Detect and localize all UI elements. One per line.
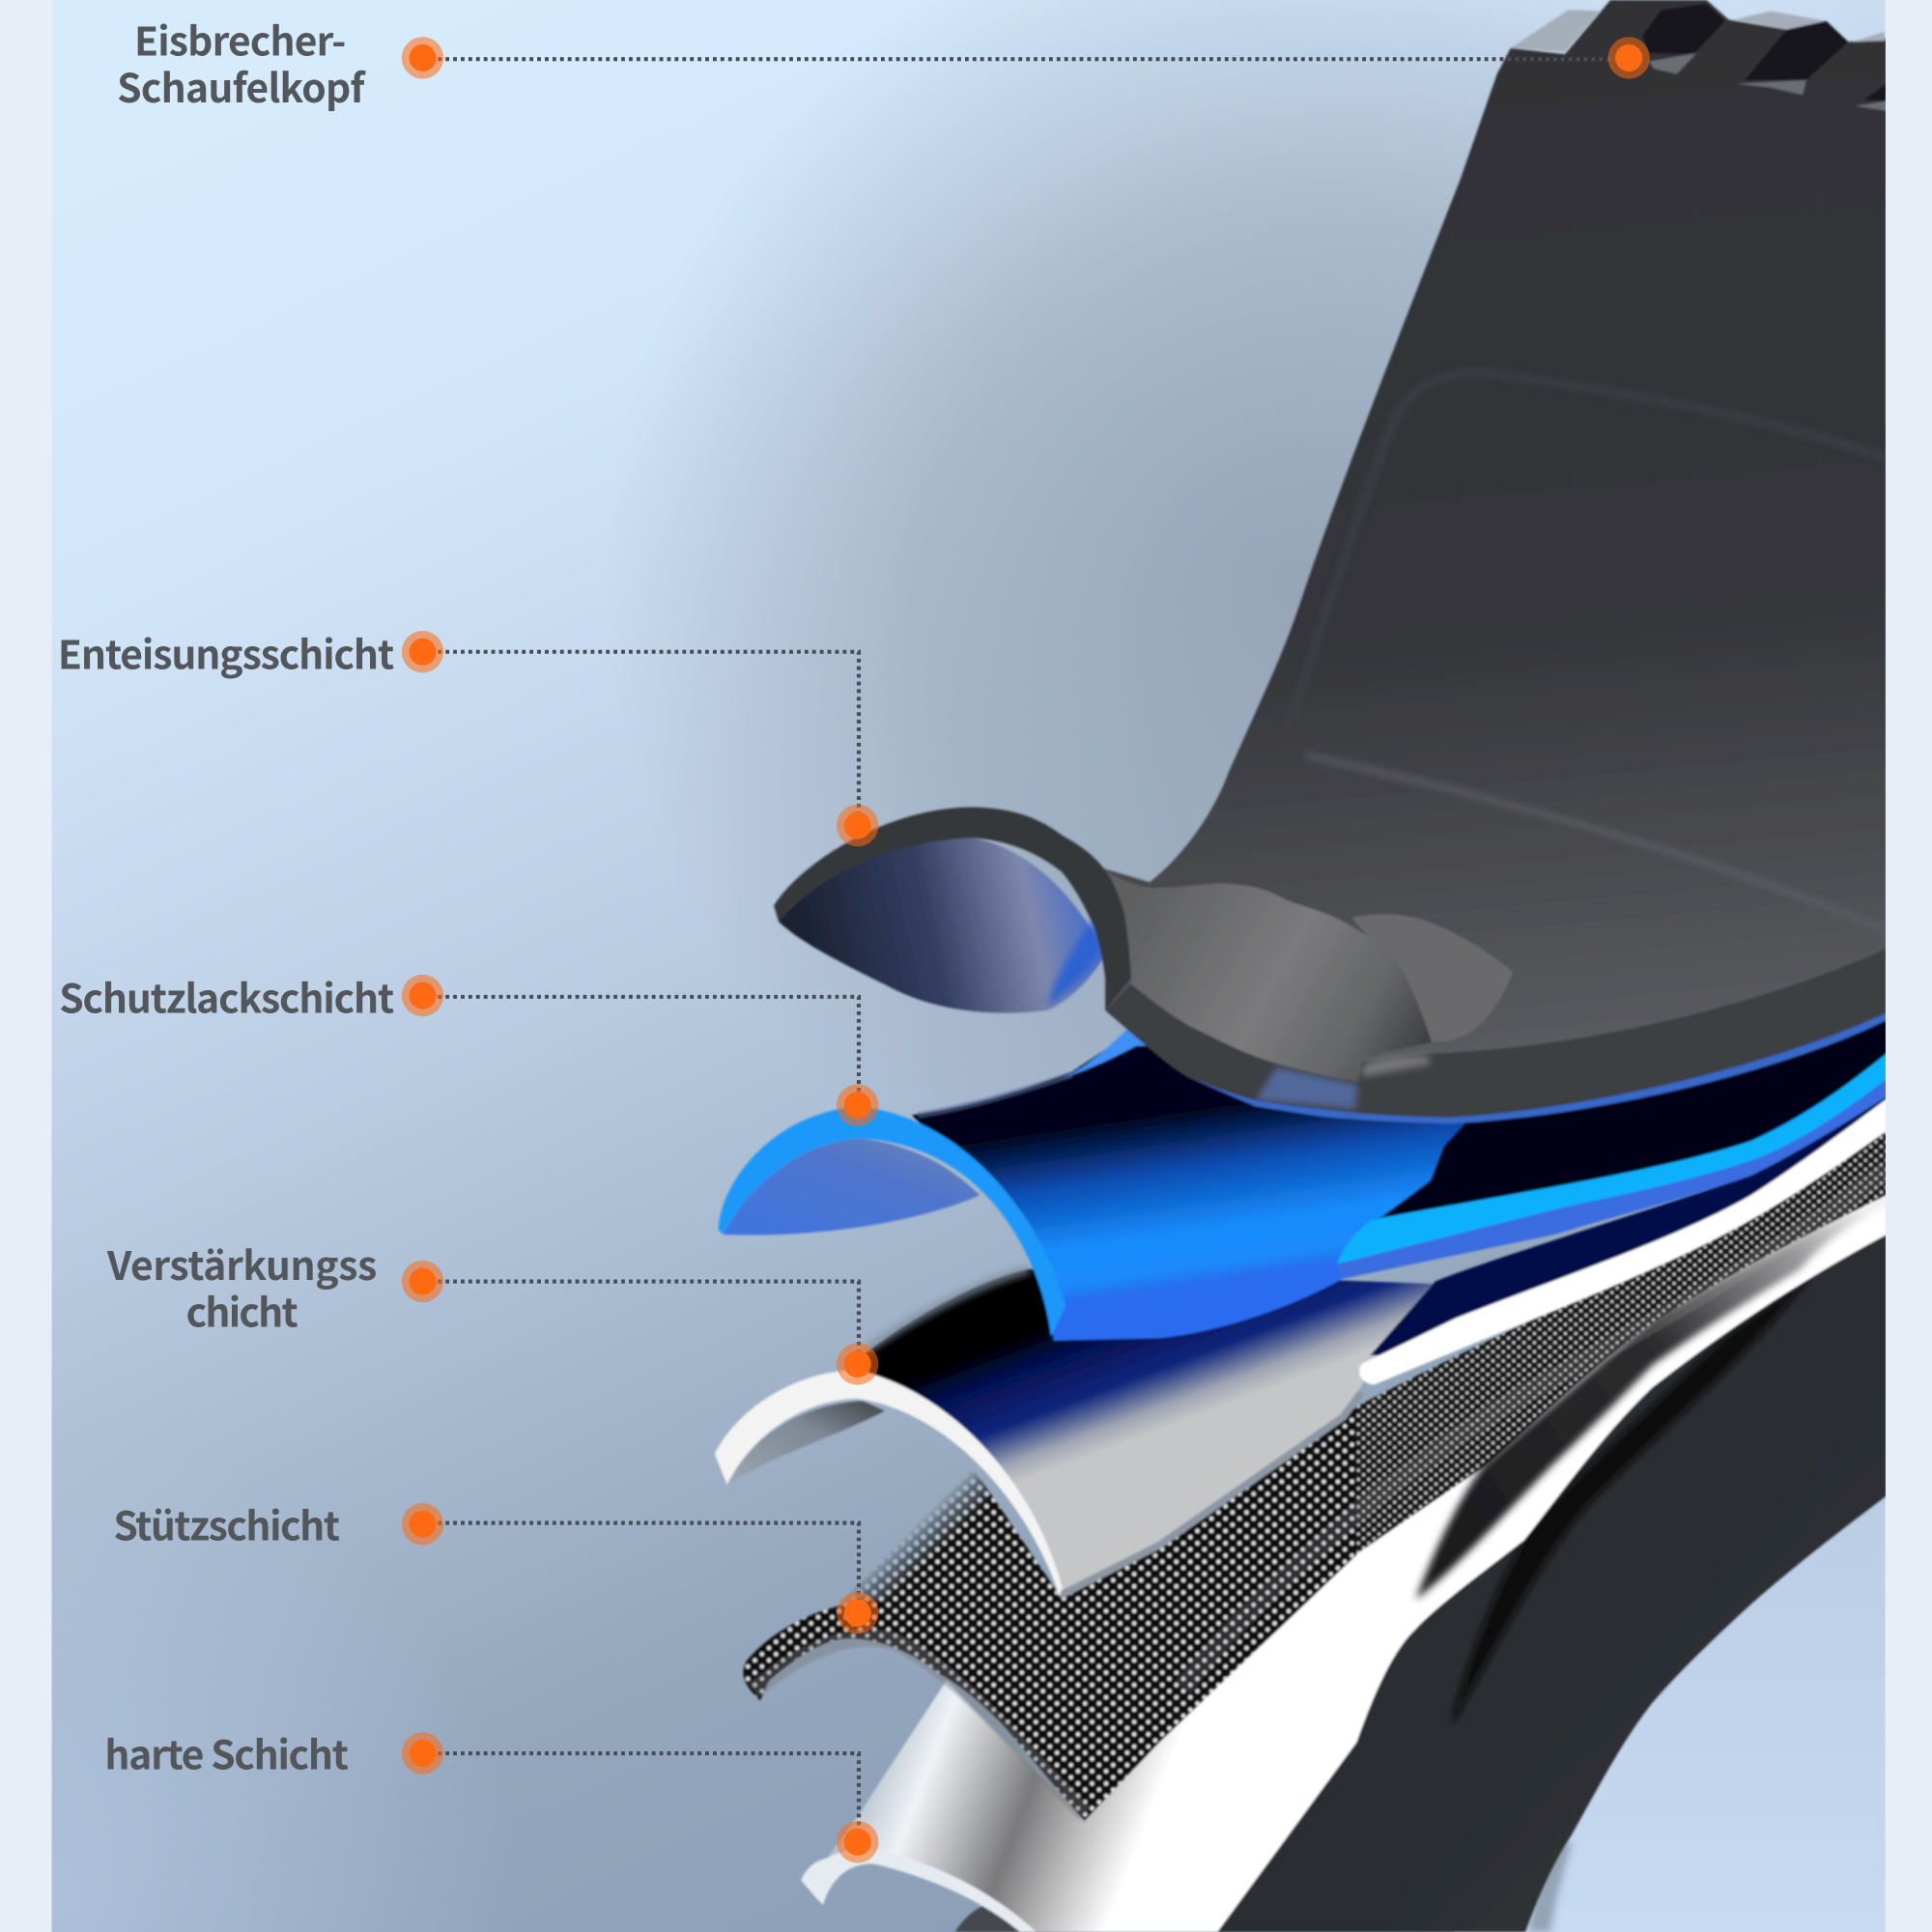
marker dots <box>402 37 1650 1863</box>
label: Stützschicht: Stützschicht <box>113 1494 340 1551</box>
layer: blue protective coating <box>719 1020 1887 1341</box>
callout lines <box>423 59 1629 1842</box>
layer: carbon support layer <box>743 1126 1887 1821</box>
label: Enteisungsschicht: Enteisungsschicht <box>58 624 394 681</box>
layer: white reinforcement layer <box>715 1091 1887 1597</box>
label: Verstärkungsschicht: Verstärkungss <box>106 1235 377 1292</box>
layer: de-icing layer cross-section <box>774 807 1131 1013</box>
label: harte Schicht: harte Schicht <box>104 1724 349 1781</box>
layer: black shovel body <box>1104 0 1887 1123</box>
head: teeth of the shovel <box>1511 4 1887 111</box>
illustration: layered shovel <box>715 0 1887 1932</box>
label: Eisbrecher-Schaufelkopf: Schaufelkopf <box>117 57 366 114</box>
layer: hard silver layer <box>801 1171 1887 1932</box>
layer: black lower shaft <box>955 1235 1887 1932</box>
label: Schutzlackschicht: Schutzlackschicht <box>59 967 394 1024</box>
label: Eisbrecher-Schaufelkopf: Eisbrecher- <box>134 10 346 67</box>
label: Verstärkungsschicht: chicht <box>186 1282 298 1339</box>
